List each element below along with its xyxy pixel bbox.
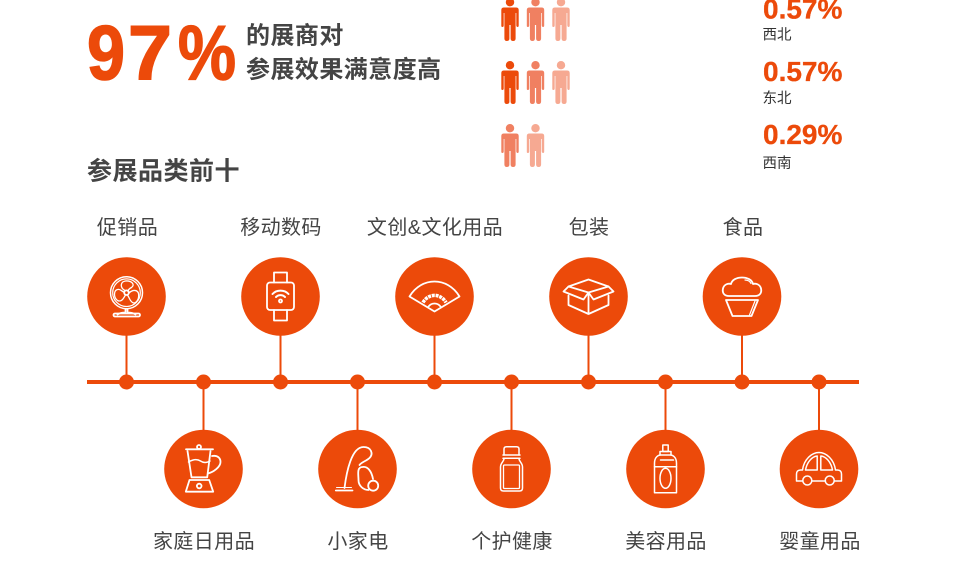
section heading: 参展品类前十 (87, 156, 240, 186)
icon: vacuum cleaner (336, 447, 378, 491)
category: stationery and culture (367, 216, 503, 336)
category: personal care: 个护健康 (471, 530, 553, 553)
category: baby and children: 婴童用品 (779, 530, 861, 553)
category: household goods: 家庭日用品 (153, 530, 255, 553)
category: packaging: 包装 (569, 216, 609, 239)
northeast stat: 东北 (762, 90, 792, 107)
big number 97% (87, 10, 236, 96)
icon: spray bottle (654, 445, 676, 493)
icon: toy car (796, 452, 842, 485)
headline: 97% satisfaction (87, 10, 442, 96)
icon: folding fan (410, 282, 460, 312)
southwest stat: 0.29% (763, 119, 842, 150)
category: small appliances: 小家电 (327, 530, 389, 553)
big number 97%: % (178, 10, 236, 96)
icon: open box (564, 280, 614, 314)
northwest stat (762, 0, 842, 44)
regional percentages (762, 0, 842, 172)
category: beauty: 美容用品 (625, 530, 707, 553)
southwest stat: 西南 (762, 155, 792, 172)
big number 97%: 7 (128, 10, 172, 96)
category: beauty (625, 430, 707, 553)
category: household goods (153, 430, 255, 553)
satisfaction caption: 参展效果满意度高 (246, 56, 442, 84)
category: promotional goods: 促销品 (97, 216, 158, 239)
category: food (703, 216, 781, 336)
category: personal care (471, 430, 553, 553)
icon: blender (186, 445, 220, 492)
category: packaging (549, 216, 628, 336)
category: baby and children (779, 430, 861, 553)
category: food: 食品 (723, 216, 763, 239)
southwest stat (762, 119, 842, 172)
northwest stat: 西北 (762, 26, 792, 44)
category: mobile digital (240, 216, 322, 336)
category: stationery and culture: 文创&文化用品 (367, 216, 503, 239)
icon: smartwatch (267, 272, 294, 320)
satisfaction caption: 的展商对 (246, 22, 344, 50)
category: mobile digital: 移动数码 (240, 216, 322, 239)
axis line (87, 380, 859, 384)
row 3 icons (501, 124, 544, 167)
icon: bottle (500, 447, 522, 491)
row 1 icons (501, 0, 570, 41)
row 2 icons (501, 61, 570, 104)
category: promotional goods (87, 216, 166, 336)
axis dots (119, 374, 826, 390)
category: small appliances (318, 430, 397, 553)
big number 97%: 9 (87, 10, 125, 96)
icon: fan (110, 277, 142, 316)
satisfaction caption (246, 22, 442, 84)
northeast stat: 0.57% (763, 56, 842, 87)
connectors (126, 300, 819, 465)
northeast stat (762, 56, 842, 107)
icon: cupcake (723, 278, 761, 316)
timeline (87, 300, 859, 465)
person icons: regional share (501, 0, 570, 167)
